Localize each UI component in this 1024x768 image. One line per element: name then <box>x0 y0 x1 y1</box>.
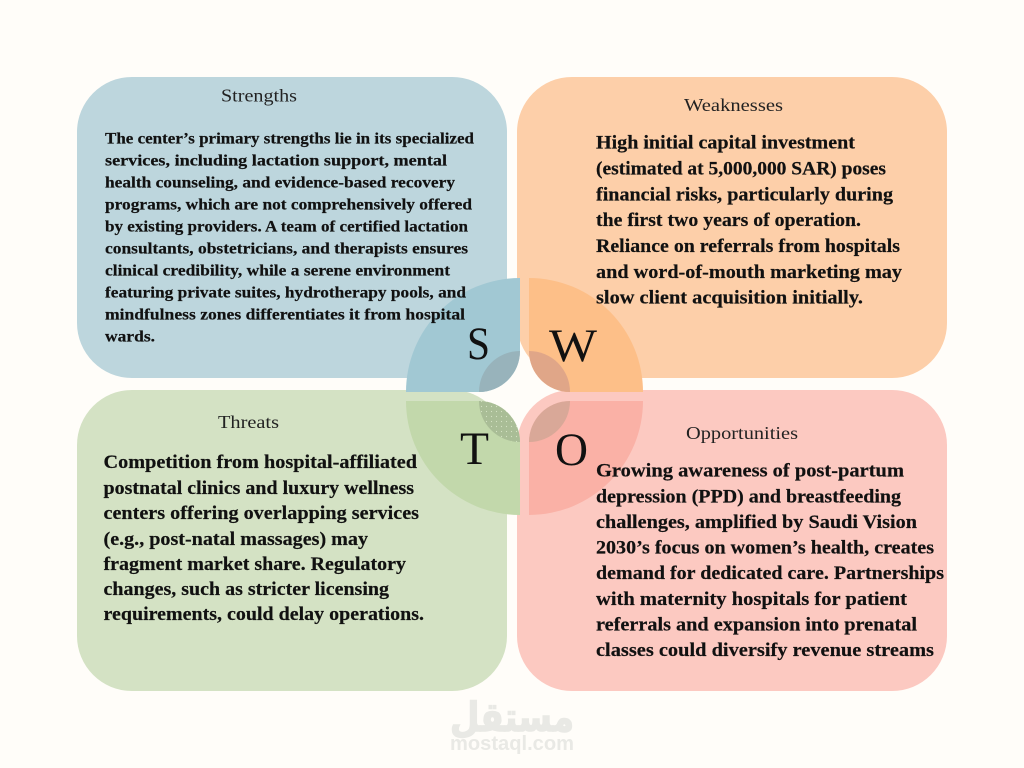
panel: opportunities background <box>517 390 947 691</box>
text block: weaknesses: Reliance on referrals from hospitals <box>596 236 900 257</box>
text block: threats: centers offering overlapping services <box>104 503 419 524</box>
letter O: O <box>555 424 588 476</box>
watermark: mostaql logo: mostaql.com <box>450 733 574 755</box>
text block: strengths <box>105 130 474 346</box>
text block: threats: (e.g., post-natal massages) may <box>104 529 369 550</box>
text block: opportunities: demand for dedicated care. Partnerships <box>596 563 944 584</box>
text block: strengths: clinical credibility, while a serene environment <box>105 262 451 280</box>
text block: opportunities: referrals and expansion into prenatal <box>596 614 917 636</box>
text block: strengths: programs, which are not comprehensively offered <box>105 196 472 214</box>
text block: opportunities: challenges, amplified by Saudi Vision <box>596 512 917 533</box>
text block: weaknesses: financial risks, particularly during <box>596 184 894 206</box>
text block: weaknesses <box>596 132 903 308</box>
panel: strengths background <box>77 77 507 378</box>
text block: threats: postnatal clinics and luxury wellness <box>104 478 414 499</box>
text block: opportunities: 2030’s focus on women’s health, creates <box>596 538 934 558</box>
text block: weaknesses: High initial capital investment <box>596 132 856 154</box>
text block: threats: requirements, could delay operations. <box>104 604 424 625</box>
quarter: O <box>529 401 643 515</box>
quarter: W <box>529 278 643 392</box>
letter W: W <box>549 320 598 372</box>
heading: Weaknesses: Weaknesses <box>684 95 783 115</box>
overlap leaf: T <box>479 401 520 442</box>
panel: threats background <box>77 390 507 691</box>
quarter: T <box>406 401 520 515</box>
heading: Threats: Threats <box>218 412 279 432</box>
text block: strengths: The center’s primary strengths lie in its specialized <box>105 130 474 148</box>
overlap leaf: O <box>529 401 570 442</box>
overlap leaf: W <box>529 351 570 392</box>
text block: threats: Competition from hospital-affiliated <box>104 452 417 473</box>
text block: threats: changes, such as stricter licensing <box>104 579 390 600</box>
text block: strengths: wards. <box>105 328 155 346</box>
text block: threats: fragment market share. Regulatory <box>104 554 407 575</box>
text block: strengths: by existing providers. A team of certified lactation <box>105 218 468 236</box>
watermark: mostaql logo <box>450 695 574 755</box>
text block: threats <box>104 452 424 625</box>
text block: strengths: featuring private suites, hydrotherapy pools, and <box>105 284 466 302</box>
overlap leaf: S <box>479 351 520 392</box>
text block: strengths: consultants, obstetricians, and therapists ensures <box>105 240 468 258</box>
watermark: mostaql logo: مستقل <box>450 695 574 741</box>
text block: strengths: services, including lactation support, mental <box>105 152 448 170</box>
text block: opportunities: with maternity hospitals for patient <box>596 589 908 610</box>
letter S: S <box>467 318 490 370</box>
text block: weaknesses: slow client acquisition initially. <box>596 288 863 308</box>
text block: opportunities: Growing awareness of post-partum <box>596 460 904 482</box>
text block: weaknesses: the first two years of operation. <box>596 210 861 231</box>
panel: weaknesses background <box>517 77 947 378</box>
text block: opportunities: depression (PPD) and breastfeeding <box>596 486 902 508</box>
heading: Strengths: Strengths <box>221 86 297 106</box>
heading: Opportunities: Opportunities <box>686 423 798 443</box>
central SWOT quarter-circle motif <box>406 278 643 515</box>
text block: strengths: health counseling, and evidence-based recovery <box>105 174 455 192</box>
letter T: T <box>460 423 489 475</box>
text block: opportunities: classes could diversify revenue streams <box>596 640 934 661</box>
text block: opportunities <box>596 460 944 661</box>
text block: weaknesses: (estimated at 5,000,000 SAR) poses <box>596 158 886 180</box>
quarter: S <box>406 278 520 392</box>
text block: weaknesses: and word-of-mouth marketing may <box>596 262 903 283</box>
text block: strengths: mindfulness zones differentiates it from hospital <box>105 306 466 324</box>
